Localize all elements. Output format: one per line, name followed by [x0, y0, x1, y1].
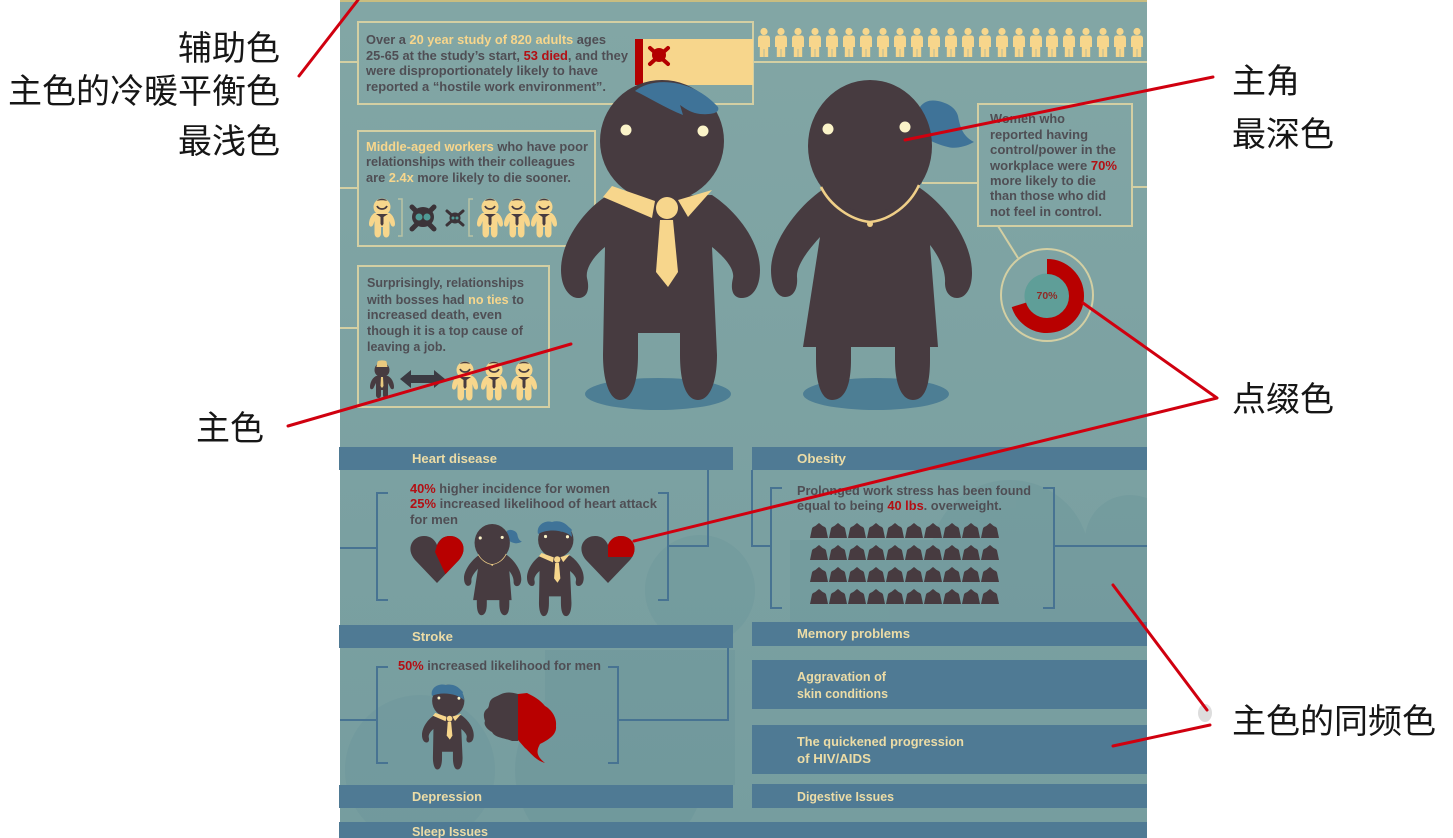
section: obesity: Obesity — [797, 452, 846, 466]
character: man — [561, 80, 760, 410]
text box: control at work — [922, 104, 1147, 226]
annotation: protagonist darkest colour: 主角 — [1232, 63, 1300, 101]
text box: control at work: than those who did — [990, 189, 1106, 203]
text box: 20 year study: were disproportionately likely to have — [365, 64, 598, 78]
icons: boss, arrow and three workers — [370, 360, 537, 400]
annotation: secondary colour: 辅助色 — [178, 30, 280, 68]
section: heart disease — [339, 447, 733, 616]
text box: 20 year study — [340, 22, 753, 104]
icons: worker versus skulls and three workers — [369, 198, 557, 238]
bar: skin conditions — [752, 660, 1147, 709]
text box: 20 year study: reported a “hostile work environment”. — [366, 80, 606, 94]
chart: 70% donut — [998, 226, 1093, 341]
icon grid: 40 weights — [810, 523, 999, 604]
text box: 20 year study: Over a 20 year study of 820 adults ages — [366, 33, 606, 47]
chart: 70% donut: 70% — [1036, 290, 1058, 302]
section: obesity: equal to being 40 lbs. overweight. — [797, 499, 1002, 513]
text box: relationships with bosses: with bosses had no ties to — [366, 293, 524, 307]
section: obesity: Prolonged work stress has been found — [797, 484, 1031, 498]
icon: heart 25% red — [581, 536, 635, 583]
annotation: secondary colour: 最浅色 — [178, 123, 280, 161]
bar: skin conditions: skin conditions — [797, 687, 888, 701]
section: heart disease: Heart disease — [412, 452, 497, 466]
text box: control at work: more likely to die — [990, 174, 1096, 188]
icon: half red brain — [484, 692, 556, 763]
annotation: protagonist darkest colour — [1232, 63, 1334, 154]
text box: middle-aged workers: Middle-aged workers who have poor — [366, 140, 588, 154]
section: heart disease: 40% higher incidence for women — [410, 482, 610, 496]
text box: control at work: workplace were 70% — [989, 159, 1117, 173]
text box: control at work: Women who — [990, 112, 1065, 126]
section: stroke: 50% increased likelihood for men — [398, 659, 601, 673]
bar: digestive issues — [752, 784, 1147, 808]
text box: middle-aged workers — [340, 131, 595, 246]
annotation: analogous colour: 主色的同频色 — [1232, 703, 1436, 741]
text box: control at work: control/power in the — [990, 143, 1116, 157]
text box: relationships with bosses: though it is a top cause of — [367, 324, 524, 338]
text box: relationships with bosses: leaving a job. — [367, 340, 446, 354]
section: stroke — [339, 625, 733, 770]
annotation: protagonist darkest colour: 最深色 — [1232, 116, 1334, 154]
icon: small woman — [464, 524, 522, 615]
text box: middle-aged workers: relationships with their colleagues — [366, 155, 575, 169]
bar: depression — [339, 785, 733, 808]
bar: memory problems — [752, 622, 1147, 646]
icon: small man — [422, 685, 474, 770]
text box: middle-aged workers: are 2.4x more likely to die sooner. — [366, 171, 571, 185]
annotation: main colour: 主色 — [196, 410, 264, 448]
panel: infographic background — [339, 0, 1175, 838]
bar: HIV/AIDS progression: of HIV/AIDS — [797, 752, 871, 766]
text box: relationships with bosses: increased death, even — [367, 308, 502, 322]
text box: 20 year study: 25-65 at the study’s start, 53 died, and they — [366, 49, 628, 63]
bar: sleep issues — [339, 822, 1147, 838]
bar: HIV/AIDS progression — [752, 725, 1147, 774]
people row: 820 adults — [753, 28, 1147, 62]
character: woman — [771, 80, 974, 410]
text box: relationships with bosses: Surprisingly, relationships — [367, 276, 524, 290]
annotation: secondary colour: 主色的冷暖平衡色 — [8, 73, 280, 111]
section: heart disease: for men — [410, 513, 458, 527]
section: obesity — [752, 447, 1147, 608]
bar: skin conditions: Aggravation of — [797, 670, 887, 684]
text box: relationships with bosses — [340, 266, 549, 407]
bar: depression: Depression — [412, 790, 482, 804]
text box: control at work: not feel in control. — [990, 205, 1102, 219]
icon: heart 40% red — [410, 536, 464, 583]
text box: control at work: reported having — [990, 128, 1088, 142]
section: stroke: Stroke — [412, 630, 453, 644]
annotation arrows — [288, 0, 1217, 746]
bar: HIV/AIDS progression: The quickened progression — [797, 735, 964, 749]
section: heart disease: 25% increased likelihood of heart attack — [410, 497, 657, 511]
icon: small man — [527, 521, 584, 616]
annotation: accent colour: 点缀色 — [1232, 381, 1334, 419]
bar: digestive issues: Digestive Issues — [797, 790, 894, 804]
annotation: secondary colour — [8, 30, 280, 161]
flag: 53 deaths with skull — [635, 39, 753, 85]
bar: memory problems: Memory problems — [797, 627, 910, 641]
